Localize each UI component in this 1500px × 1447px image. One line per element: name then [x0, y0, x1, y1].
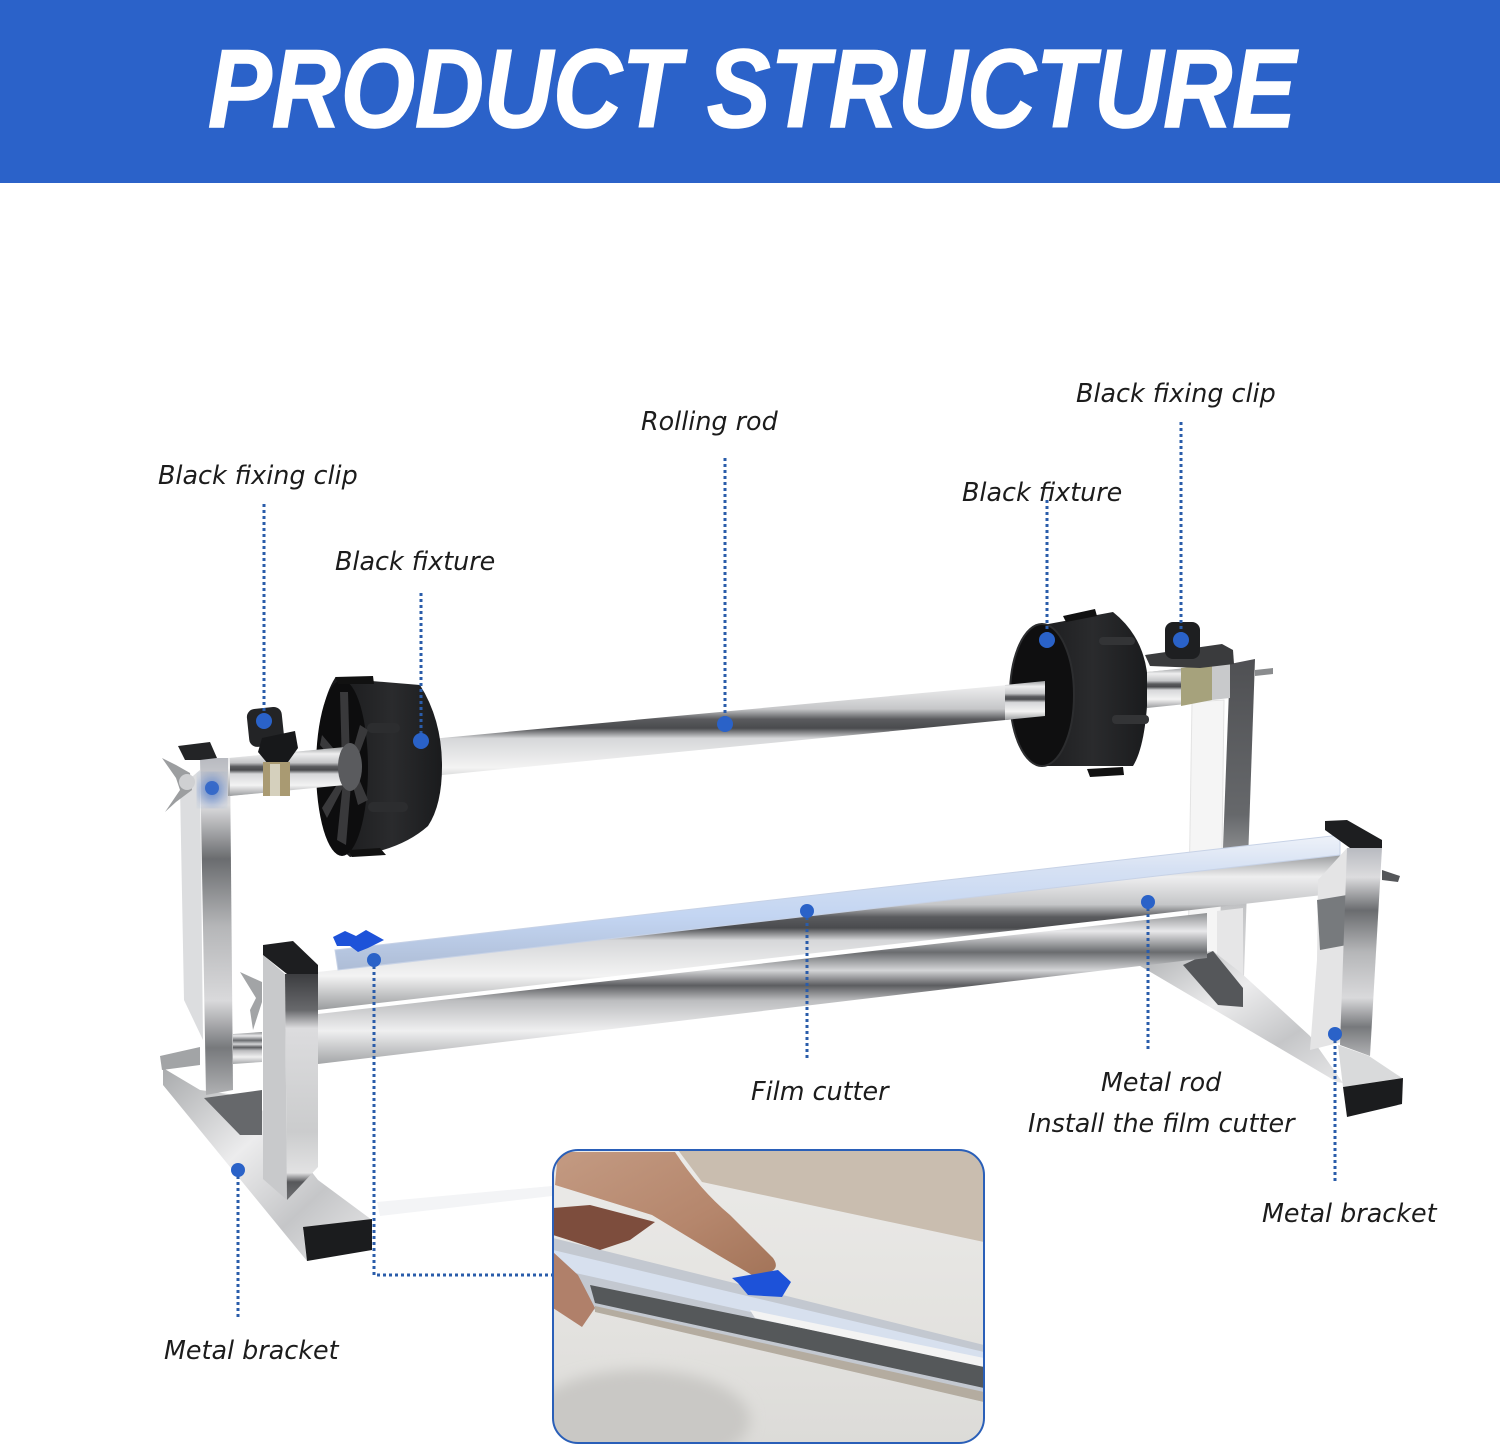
callout: metal bracket right: Metal bracket — [1262, 1198, 1438, 1228]
callout: black fixture right: Black fixture — [962, 477, 1122, 507]
rod entering right fixture — [1005, 681, 1045, 720]
thumb — [553, 1252, 595, 1327]
clear tube and rod — [553, 1238, 984, 1402]
right bracket top plate — [1145, 644, 1234, 668]
left front post and foot — [160, 941, 372, 1261]
callout: rolling rod — [641, 406, 779, 732]
callout: film cutter — [751, 904, 890, 1106]
callout: black fixture left: Black fixture — [335, 546, 495, 576]
rear left post and foot — [163, 742, 372, 1261]
callout: metal rod: Metal rod — [1101, 1067, 1222, 1097]
tan background band — [678, 1150, 984, 1242]
callout: inset connector — [367, 953, 552, 1275]
callout: metal bracket left: Metal bracket — [164, 1335, 340, 1365]
callout: rolling rod: Rolling rod — [641, 406, 779, 436]
callout: black fixture left — [335, 546, 495, 749]
callout: black fixing clip left — [158, 460, 358, 729]
callout: black fixing clip right — [1076, 378, 1276, 648]
right front post and foot — [1310, 820, 1403, 1117]
rear lower metal rod — [233, 913, 1207, 1064]
callout: metal bracket left — [164, 1163, 340, 1365]
callout: metal bracket right — [1262, 1027, 1438, 1228]
inset photo: cutting film — [530, 1150, 984, 1447]
left black fixture — [316, 676, 442, 857]
right black fixture — [1010, 609, 1149, 777]
rear right foot — [1130, 951, 1343, 1083]
callout: metal rod — [1028, 895, 1296, 1138]
table shadow — [377, 1186, 552, 1216]
callout: black fixing clip left: Black fixing clip — [158, 460, 358, 490]
blue cutter slider — [333, 930, 384, 952]
rolling rod — [228, 668, 1190, 796]
grey table shadow — [554, 1367, 751, 1442]
callout: film cutter: Film cutter — [751, 1076, 890, 1106]
title: PRODUCT STRUCTURE — [208, 27, 1299, 151]
left wing nut — [162, 758, 195, 812]
pressing finger — [555, 1152, 776, 1275]
front metal rod — [318, 855, 1340, 1010]
callout: black fixing clip right: Black fixing clip — [1076, 378, 1276, 408]
left fixing clip — [246, 706, 298, 796]
rod between bracket and left fixture — [230, 747, 345, 796]
rod end and clamp on right — [1147, 662, 1230, 708]
product photo: film roller stand — [160, 609, 1403, 1261]
left hub — [338, 743, 362, 791]
callout: metal rod: Install the film cutter — [1028, 1108, 1296, 1138]
right fixing clip — [1165, 622, 1200, 659]
blue glare on bracket — [201, 777, 223, 803]
callout: black fixture right — [962, 477, 1122, 648]
back fingers — [553, 1205, 655, 1250]
header banner — [0, 0, 1500, 183]
transparent film cutter tube — [335, 835, 1340, 970]
rear right post — [1188, 659, 1273, 1005]
blue slider in inset — [732, 1270, 791, 1297]
